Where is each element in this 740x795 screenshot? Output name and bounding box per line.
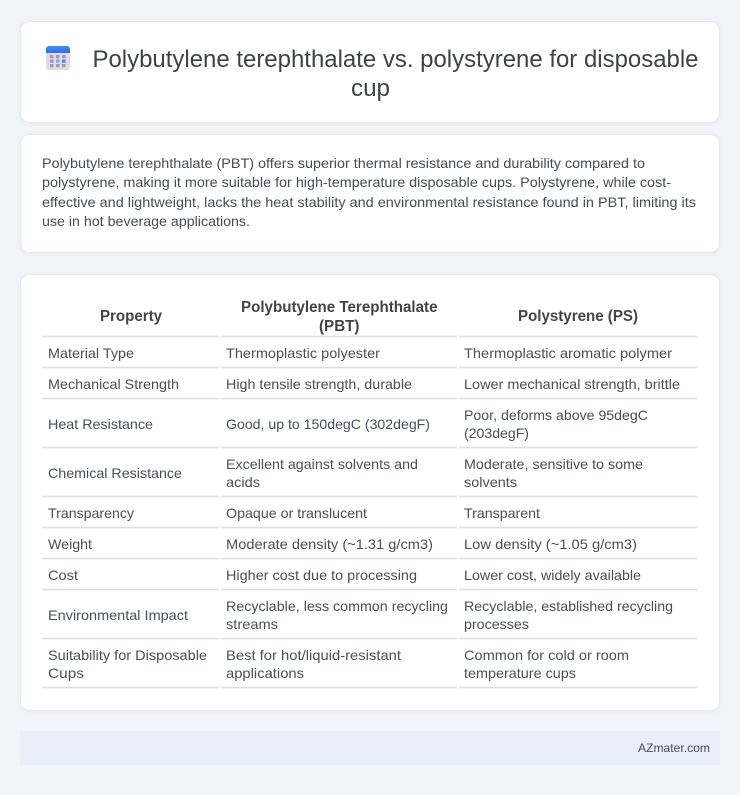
row: heat resistance: Heat Resistance [48,416,153,432]
row: environmental impact: Environmental Impact [48,607,188,623]
title: Polybutylene terephthalate vs. polystyrene for disposable [92,46,698,73]
row: transparency: Opaque or translucent [226,505,367,521]
row: weight: Low density (~1.05 g/cm3) [464,536,637,552]
row: suitability for disposable cups: Best for hot/liquid-resistant [226,647,401,663]
title: cup [351,75,390,102]
title [92,46,698,102]
row: material type [48,345,672,361]
row: weight: Weight [48,536,92,552]
row: cost: Lower cost, widely available [464,567,641,583]
row: cost: Cost [48,567,78,583]
row: suitability for disposable cups: Suitability for Disposable [48,647,207,663]
row: heat resistance [48,407,648,441]
row: weight: Moderate density (~1.31 g/cm3) [226,536,433,552]
row: heat resistance: Poor, deforms above 95degC [464,407,648,423]
row: chemical resistance: acids [226,474,260,490]
row: heat resistance: Good, up to 150degC (302degF) [226,416,430,432]
intro text: Polybutylene terephthalate (PBT) offers superior thermal resistance and durability compared to [42,155,645,171]
intro text: use in hot beverage applications. [42,213,250,229]
footer brand text: AZmater.com [638,741,710,755]
row: chemical resistance: Moderate, sensitive to some [464,456,643,472]
row: chemical resistance: solvents [464,474,517,490]
row: suitability for disposable cups: Common for cold or room [464,647,629,663]
row: transparency [48,505,540,521]
row: cost [48,567,641,583]
row: chemical resistance: Excellent against solvents and [226,456,418,472]
row: weight [48,536,637,552]
intro panel [20,134,720,252]
row: material type: Thermoplastic aromatic polymer [464,345,672,361]
row: mechanical strength: Mechanical Strength [48,376,179,392]
table header row: (PBT) [319,318,360,335]
row: suitability for disposable cups: Cups [48,665,84,681]
row: chemical resistance [48,456,643,490]
row: suitability for disposable cups: temperature cups [464,665,576,681]
table header row: Property [100,308,162,325]
row: mechanical strength: High tensile strength, durable [226,376,412,392]
row: environmental impact: streams [226,616,278,632]
row: cost: Higher cost due to processing [226,567,417,583]
row: environmental impact: Recyclable, less common recycling [226,598,448,614]
table panel [20,274,720,710]
row: environmental impact: processes [464,616,529,632]
row: suitability for disposable cups: applications [226,665,304,681]
row: transparency: Transparent [464,505,540,521]
intro text [42,155,696,229]
row: chemical resistance: Chemical Resistance [48,465,182,481]
row: environmental impact [48,598,673,632]
row: material type: Thermoplastic polyester [226,345,380,361]
row: environmental impact: Recyclable, established recycling [464,598,673,614]
row: mechanical strength [48,376,680,392]
footer [20,731,720,765]
table header row [100,299,638,335]
row: material type: Material Type [48,345,134,361]
header panel [20,22,720,122]
table header row: Polystyrene (PS) [518,308,638,325]
intro text: effective and lightweight, lacks the heat stability and environmental resistance found in PBT, limiting its [42,194,696,210]
icon: calendar [46,46,70,70]
table header row: Polybutylene Terephthalate [241,299,438,316]
row: mechanical strength: Lower mechanical strength, brittle [464,376,680,392]
intro text: polystyrene, making it more suitable for high-temperature disposable cups. Polystyrene, while cost- [42,174,671,190]
row: heat resistance: (203degF) [464,425,529,441]
row: transparency: Transparency [48,505,134,521]
row: suitability for disposable cups [48,647,629,681]
